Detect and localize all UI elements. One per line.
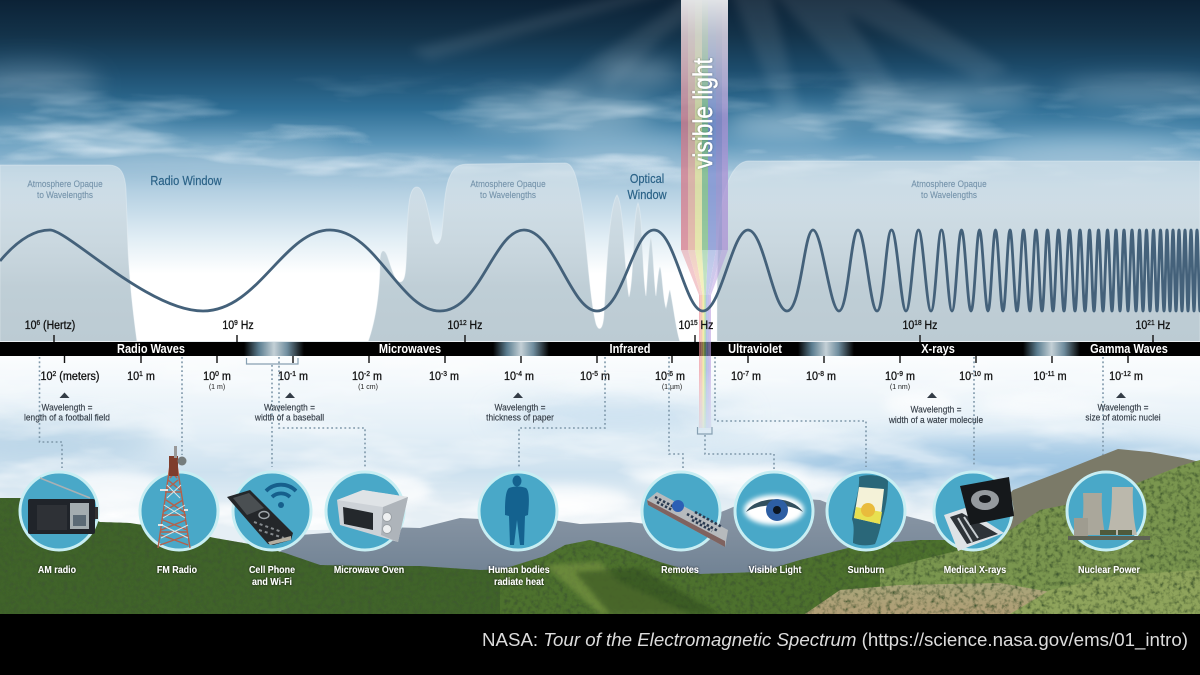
visible light beam bbox=[681, 0, 728, 295]
wavelength scale: 10 bbox=[429, 371, 441, 383]
band names: Ultraviolet bbox=[728, 342, 782, 356]
wavelength comparison: paper: Wavelength = bbox=[495, 402, 545, 413]
foreground dirt path bbox=[805, 583, 1050, 614]
central hill bbox=[500, 530, 1060, 614]
wavelength scale: 0 bbox=[215, 370, 219, 378]
wavelength scale: 10 bbox=[203, 371, 215, 383]
frequency scale: 10 bbox=[222, 319, 234, 332]
band names: Gamma Waves bbox=[1090, 342, 1168, 356]
wavelength scale: -5 bbox=[592, 370, 598, 378]
wavelength comparison: football field: length of a football field bbox=[24, 412, 110, 423]
band names: Radio Waves bbox=[117, 342, 185, 356]
wavelength scale: 10 bbox=[1109, 371, 1121, 383]
wavelength comparison: baseball bbox=[254, 392, 324, 423]
wavelength scale: m bbox=[824, 371, 836, 383]
wavelength scale: (1 m) bbox=[209, 384, 225, 391]
wavelength scale: 10 bbox=[959, 371, 971, 383]
wavelength scale: m bbox=[447, 371, 459, 383]
wavelength comparison: atomic nuclei: size of atomic nuclei bbox=[1085, 412, 1161, 423]
wavelength scale: m bbox=[143, 371, 155, 383]
frequency scale: 15 bbox=[690, 320, 698, 327]
icon captions: and Wi-Fi bbox=[252, 576, 292, 588]
wavelength comparison: baseball: width of a baseball bbox=[254, 412, 324, 423]
band names: Infrared bbox=[610, 342, 650, 356]
icon captions: Human bodies bbox=[488, 564, 550, 576]
icon: remote control bbox=[642, 472, 728, 550]
wavelength comparison: water molecule bbox=[888, 392, 983, 425]
band names: X-rays bbox=[921, 342, 955, 356]
icon: FM radio tower bbox=[140, 446, 218, 550]
frequency scale: 10 bbox=[679, 319, 690, 332]
wavelength scale: 10 bbox=[41, 371, 53, 383]
frequency scale: 10 bbox=[448, 319, 459, 332]
wavelength scale: -4 bbox=[516, 370, 522, 378]
wavelength scale: 10 bbox=[885, 371, 897, 383]
lower sky background bbox=[0, 356, 1200, 552]
icon: eye bbox=[735, 472, 813, 550]
icon captions: radiate heat bbox=[494, 576, 545, 588]
frequency scale: 10 bbox=[25, 319, 36, 332]
atmosphere labels: Atmosphere Opaque bbox=[470, 178, 546, 189]
left green hill bbox=[0, 498, 720, 614]
atmosphere labels: Atmosphere Opaque bbox=[27, 178, 103, 189]
light rays bbox=[410, 0, 1010, 112]
wavelength scale: 1 bbox=[139, 370, 143, 378]
wavelength scale: -1 bbox=[290, 370, 296, 378]
colour bands bbox=[681, 0, 728, 250]
icon: cell phone and Wi-Fi bbox=[227, 472, 311, 550]
frequency scale: (Hertz) bbox=[40, 319, 76, 332]
wavelength scale: (meters) bbox=[56, 371, 100, 383]
icon: sunscreen bottle bbox=[827, 472, 905, 550]
frequency scale: 9 bbox=[234, 320, 238, 327]
frequency scale: 21 bbox=[1147, 320, 1155, 327]
icon captions: FM Radio bbox=[157, 564, 197, 576]
atmosphere labels: to Wavelengths bbox=[480, 189, 536, 200]
wavelength scale: 10 bbox=[580, 371, 592, 383]
optical window label: Optical bbox=[630, 171, 664, 186]
wavelength comparison: water molecule: Wavelength = bbox=[911, 404, 961, 415]
footer bar bbox=[0, 614, 1200, 675]
atmospheric opacity regions bbox=[0, 161, 1200, 342]
wavelength comparison: football field bbox=[24, 392, 110, 423]
wavelength comparison: atomic nuclei: Wavelength = bbox=[1098, 402, 1148, 413]
wavelength scale: m bbox=[673, 371, 685, 383]
thin visible light beam below funnel bbox=[698, 295, 712, 434]
wave bbox=[0, 230, 1200, 311]
icon: medical X-rays bbox=[934, 472, 1014, 551]
wavelength scale: m bbox=[522, 371, 534, 383]
right rocky mountain bbox=[985, 449, 1200, 560]
upper sky background bbox=[0, 0, 1200, 342]
frequency scale: Hz bbox=[922, 319, 938, 332]
right green hillside bbox=[880, 460, 1200, 614]
band names bbox=[117, 342, 1168, 356]
wavelength scale: -10 bbox=[971, 370, 981, 378]
wavelength scale: 2 bbox=[53, 370, 56, 378]
wavelength scale: -2 bbox=[364, 370, 370, 378]
dotted connector lines bbox=[40, 357, 1103, 470]
optical window label: Window bbox=[627, 187, 667, 202]
icon captions: Microwave Oven bbox=[334, 564, 404, 576]
wavelength scale: -3 bbox=[441, 370, 447, 378]
frequency scale: 12 bbox=[459, 320, 467, 327]
frequency scale: Hz bbox=[467, 319, 483, 332]
frequency scale: 18 bbox=[914, 320, 922, 327]
band names: Microwaves bbox=[379, 342, 442, 356]
wavelength scale: (1 nm) bbox=[890, 384, 910, 391]
wavelength comparison: paper: thickness of paper bbox=[486, 412, 554, 423]
radio window label: Radio Window bbox=[150, 173, 222, 188]
wavelength scale: 10 bbox=[127, 371, 139, 383]
icon: microwave oven bbox=[326, 472, 408, 550]
wavelength comparison: football field: Wavelength = bbox=[42, 402, 92, 413]
funnel bbox=[681, 250, 728, 295]
wavelength scale: 10 bbox=[731, 371, 743, 383]
icon captions: Remotes bbox=[661, 564, 699, 576]
wavelength scale: m bbox=[296, 371, 308, 383]
source credit: NASA: Tour of the Electromagnetic Spectrum (https://science.nasa.gov/ems/01_intro) bbox=[482, 629, 1188, 651]
wavelength scale: m bbox=[749, 371, 761, 383]
frequency scale: Hz bbox=[238, 319, 254, 332]
icon: human silhouette bbox=[479, 472, 557, 550]
wavelength comparison: atomic nuclei bbox=[1085, 392, 1161, 423]
wavelength scale: 10 bbox=[352, 371, 364, 383]
wavelength scale: -11 bbox=[1045, 370, 1055, 378]
icon: nuclear power plant bbox=[1067, 472, 1150, 550]
icon captions: Sunburn bbox=[848, 564, 884, 576]
frequency scale: Hz bbox=[698, 319, 714, 332]
icon captions: Cell Phone bbox=[249, 564, 296, 576]
far mountains bbox=[270, 498, 945, 580]
wavelength scale: m bbox=[1055, 371, 1067, 383]
optical window label bbox=[627, 171, 667, 202]
wavelength scale: 10 bbox=[278, 371, 290, 383]
icon captions: AM radio bbox=[38, 564, 76, 576]
atmosphere labels bbox=[27, 178, 987, 200]
wavelength scale: m bbox=[903, 371, 915, 383]
visible light title: visible light bbox=[688, 58, 718, 169]
atmosphere labels: to Wavelengths bbox=[921, 189, 977, 200]
icon captions: Nuclear Power bbox=[1078, 564, 1140, 576]
frequency scale: 10 bbox=[1136, 319, 1147, 332]
wavelength scale: m bbox=[370, 371, 382, 383]
frequency scale: 6 bbox=[36, 320, 40, 327]
wavelength scale: 10 bbox=[655, 371, 667, 383]
wavelength comparison: paper bbox=[486, 392, 554, 423]
wavelength scale: 10 bbox=[806, 371, 818, 383]
atmosphere labels: Atmosphere Opaque bbox=[911, 178, 987, 189]
wavelength scale: -9 bbox=[897, 370, 903, 378]
frequency scale bbox=[25, 319, 1171, 342]
wavelength scale: -7 bbox=[743, 370, 749, 378]
icon captions: Visible Light bbox=[749, 564, 802, 576]
wavelength scale bbox=[41, 356, 1143, 391]
wavelength scale: m bbox=[981, 371, 993, 383]
wavelength scale: m bbox=[1131, 371, 1143, 383]
frequency scale: Hz bbox=[1155, 319, 1171, 332]
wavelength scale: (1 cm) bbox=[358, 384, 378, 391]
atmosphere labels: to Wavelengths bbox=[37, 189, 93, 200]
wavelength scale: m bbox=[598, 371, 610, 383]
clouds in the sky bbox=[0, 70, 1200, 190]
icon captions bbox=[38, 564, 1140, 588]
wavelength scale: -6 bbox=[667, 370, 673, 378]
landscape bbox=[0, 449, 1200, 614]
wavelength scale: 10 bbox=[504, 371, 516, 383]
spectrum bar bbox=[0, 341, 1200, 356]
wavelength scale: 10 bbox=[1033, 371, 1045, 383]
wavelength comparison: water molecule: width of a water molecule bbox=[888, 415, 983, 425]
icon: AM radio bbox=[20, 472, 98, 550]
wavelength scale: m bbox=[219, 371, 231, 383]
wavelength comparison: baseball: Wavelength = bbox=[264, 402, 315, 413]
wavelength scale: (1 µm) bbox=[662, 384, 682, 391]
frequency scale: 10 bbox=[903, 319, 914, 332]
wavelength scale: -12 bbox=[1121, 370, 1131, 378]
icon captions: Medical X-rays bbox=[944, 564, 1007, 576]
wavelength scale: -8 bbox=[818, 370, 824, 378]
